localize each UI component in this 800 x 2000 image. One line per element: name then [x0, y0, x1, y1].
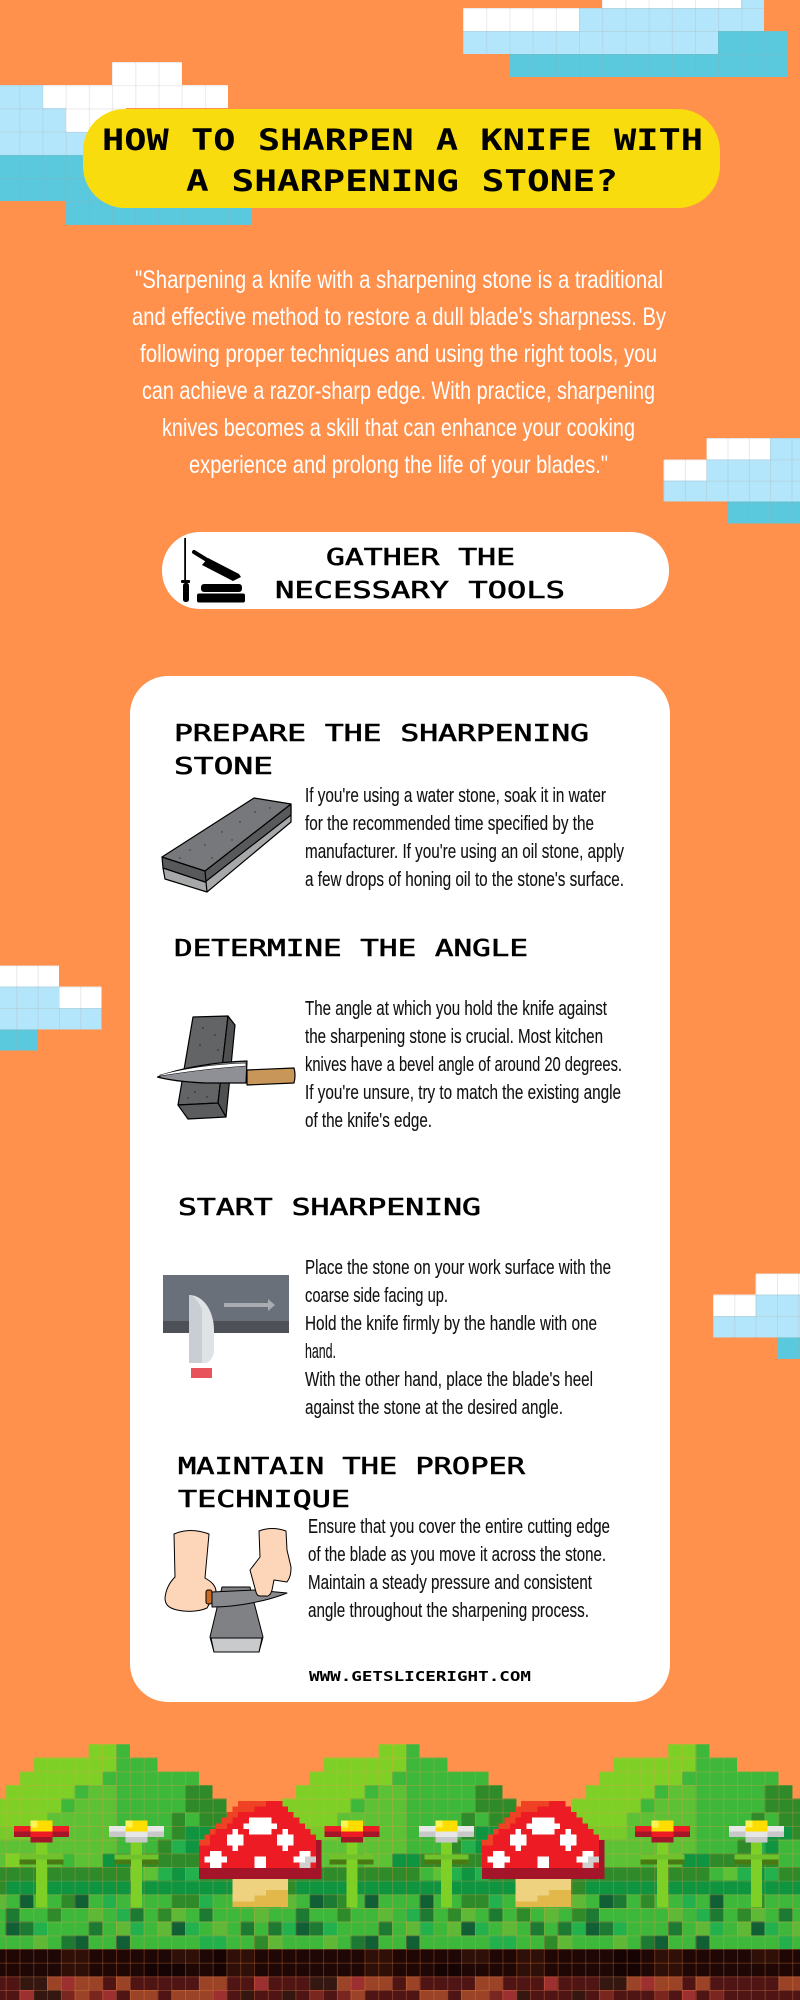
text: maintain the technique: Ensure that you cover the entire cutting edge [308, 1516, 610, 1538]
text: start sharpening [305, 1257, 611, 1419]
text: prepare the stone: manufacturer. If you're using an oil stone, apply [305, 841, 624, 863]
heading: determine the angle: DETERMINE THE ANGLE [174, 936, 528, 962]
pixel landscape [0, 1744, 800, 2000]
panel: steps card [130, 676, 670, 1702]
pixel grid overlay [0, 1744, 800, 2000]
soil [0, 1949, 800, 2000]
text: start sharpening: With the other hand, place the blade's heel [305, 1369, 593, 1391]
mushroom: right [482, 1801, 605, 1907]
icon: hands sharpening knife on stone [165, 1528, 291, 1652]
title banner: HOW TO SHARPEN A KNIFE WITH [102, 123, 703, 157]
intro paragraph: experience and prolong the life of your blades." [189, 451, 608, 479]
text: start sharpening: coarse side facing up. [305, 1285, 448, 1307]
intro paragraph: and effective method to restore a dull blade's sharpness. By [132, 303, 666, 331]
text: prepare the stone [305, 785, 624, 891]
heading: maintain the proper technique [178, 1454, 525, 1513]
mushroom: left [199, 1801, 322, 1907]
title banner: A SHARPENING STONE? [186, 164, 618, 198]
icon: knife, steel and stones [181, 538, 245, 602]
cloud: top right [463, 0, 787, 77]
text: start sharpening: against the stone at the desired angle. [305, 1397, 563, 1419]
cloud: middle right upper [664, 438, 800, 523]
text: start sharpening: Place the stone on your work surface with the [305, 1257, 611, 1279]
intro paragraph: following proper techniques and using the right tools, you [140, 340, 657, 368]
hills and grass [0, 1744, 800, 1950]
website url: WWW.GETSLICERIGHT.COM [309, 1670, 531, 1685]
flowers [14, 1821, 784, 1908]
intro paragraph: knives becomes a skill that can enhance your cooking [162, 414, 635, 442]
text: maintain the technique: of the blade as you move it across the stone. [308, 1544, 606, 1566]
intro paragraph [132, 266, 666, 479]
intro paragraph: can achieve a razor-sharp edge. With practice, sharpening [142, 377, 655, 405]
text: maintain the technique [308, 1516, 610, 1622]
text: maintain the technique: angle throughout the sharpening process. [308, 1600, 589, 1622]
text: determine the angle: If you're unsure, try to match the existing angle [305, 1082, 621, 1104]
heading: maintain the proper technique: TECHNIQUE [178, 1487, 350, 1513]
heading: prepare the sharpening stone: STONE [174, 754, 273, 780]
icon: sharpening stone [162, 798, 291, 892]
icon: blade on stone with arrow [163, 1275, 289, 1378]
cloud: top left [0, 62, 251, 225]
text: determine the angle: knives have a bevel angle of around 20 degrees. [305, 1054, 622, 1076]
heading: start sharpening: START SHARPENING [178, 1195, 481, 1221]
heading: maintain the proper technique: MAINTAIN THE PROPER [178, 1454, 525, 1480]
heading: prepare the sharpening stone: PREPARE THE SHARPENING [174, 721, 589, 747]
text: prepare the stone: If you're using a water stone, soak it in water [305, 785, 606, 807]
text: start sharpening: hand. [305, 1341, 336, 1363]
section pill: gather the necessary tools [162, 532, 669, 609]
text: maintain the technique: Maintain a steady pressure and consistent [308, 1572, 592, 1594]
text: prepare the stone: for the recommended time specified by the [305, 813, 594, 835]
section pill: gather the necessary tools: GATHER THE [326, 545, 515, 571]
intro paragraph: "Sharpening a knife with a sharpening stone is a traditional [135, 266, 663, 294]
text: prepare the stone: a few drops of honing oil to the stone's surface. [305, 869, 624, 891]
icon: knife on stone [158, 1016, 295, 1119]
text: determine the angle [305, 998, 622, 1132]
heading: prepare the sharpening stone [174, 721, 589, 780]
section pill: gather the necessary tools: NECESSARY TOOLS [275, 578, 565, 604]
cloud: middle left [0, 965, 101, 1051]
text: determine the angle: of the knife's edge. [305, 1110, 432, 1132]
title banner [83, 109, 720, 208]
cloud: middle right lower [713, 1273, 800, 1359]
text: determine the angle: The angle at which you hold the knife against [305, 998, 607, 1020]
text: determine the angle: the sharpening stone is crucial. Most kitchen [305, 1026, 603, 1048]
text: start sharpening: Hold the knife firmly by the handle with one [305, 1313, 597, 1335]
